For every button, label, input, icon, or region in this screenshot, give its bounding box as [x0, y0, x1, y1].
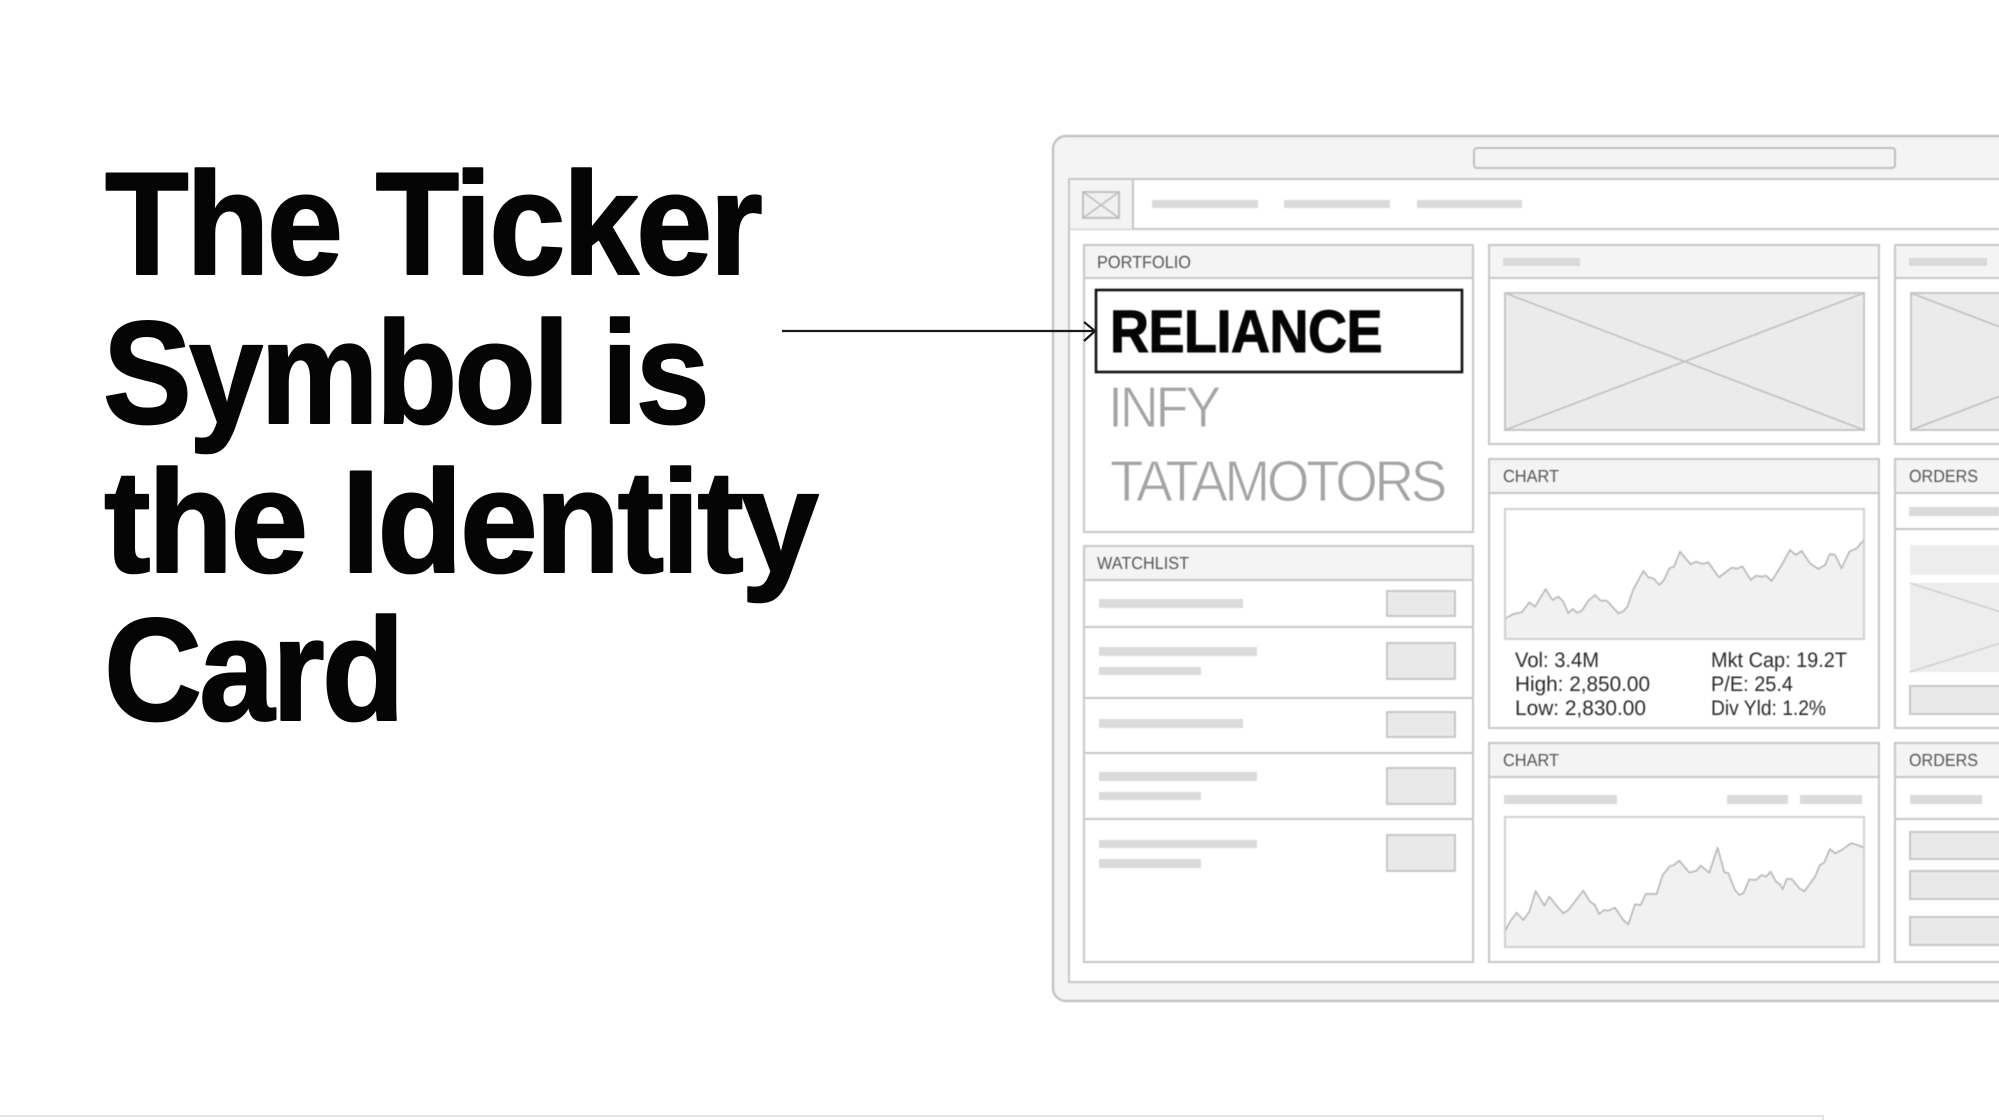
panel: portfolio — [1084, 245, 1473, 532]
arrow: title to RELIANCE — [782, 322, 1095, 341]
stats: volume, high, low: High: 2,850.00 — [1515, 673, 1650, 696]
stats: volume, high, low: Low: 2,830.00 — [1515, 697, 1646, 720]
address bar — [1474, 148, 1895, 168]
line chart — [1504, 509, 1864, 639]
stats: volume, high, low: Vol: 3.4M — [1515, 649, 1599, 672]
title: Card — [104, 588, 402, 751]
title: Symbol is — [103, 291, 707, 454]
chart heading: CHART — [1503, 466, 1559, 486]
portfolio heading: PORTFOLIO — [1097, 252, 1191, 272]
highlighted ticker: RELIANCE: RELIANCE — [1110, 298, 1382, 365]
panel: orders top — [1895, 459, 1999, 728]
icon: logo placeholder — [1083, 192, 1119, 218]
stats: volume, high, low — [1515, 649, 1650, 720]
ticker: TATAMOTORS: TATAMOTORS — [1110, 449, 1446, 514]
panel: right column image placeholder — [1895, 245, 1999, 444]
watchlist row 4 — [1099, 768, 1455, 804]
watchlist row 2 — [1099, 643, 1455, 679]
panel: second chart — [1489, 743, 1879, 962]
watchlist heading: WATCHLIST — [1097, 553, 1189, 573]
panel: orders bottom — [1895, 743, 1999, 962]
title: the Identity — [104, 440, 819, 603]
inner viewport — [1069, 179, 1999, 982]
window frame — [1053, 136, 1999, 1001]
bottom edge line — [0, 1116, 1823, 1120]
watchlist row 1 — [1099, 591, 1455, 616]
title: The Ticker — [105, 142, 761, 305]
image placeholder — [1910, 583, 1999, 672]
orders heading: ORDERS — [1909, 466, 1978, 486]
stats: market cap, P/E, dividend yield: Mkt Cap: 19.2T — [1711, 649, 1847, 672]
stats: market cap, P/E, dividend yield: Div Yld: 1.2% — [1711, 697, 1826, 720]
ticker: INFY: INFY — [1108, 375, 1221, 440]
stats: market cap, P/E, dividend yield — [1711, 649, 1847, 720]
navigation bar — [1069, 179, 1999, 229]
stats: market cap, P/E, dividend yield: P/E: 25.4 — [1711, 673, 1793, 696]
highlighted ticker: RELIANCE — [1096, 290, 1462, 372]
orders heading: ORDERS — [1909, 750, 1978, 770]
panel: image placeholder — [1489, 245, 1879, 444]
chart heading: CHART — [1503, 750, 1559, 770]
line chart — [1504, 817, 1864, 947]
panel: watchlist — [1084, 546, 1473, 962]
watchlist row 3 — [1099, 712, 1455, 737]
app window wireframe — [1053, 136, 1999, 1001]
title — [103, 142, 819, 751]
panel: chart with stats — [1489, 459, 1879, 728]
watchlist row 5 — [1099, 835, 1455, 871]
